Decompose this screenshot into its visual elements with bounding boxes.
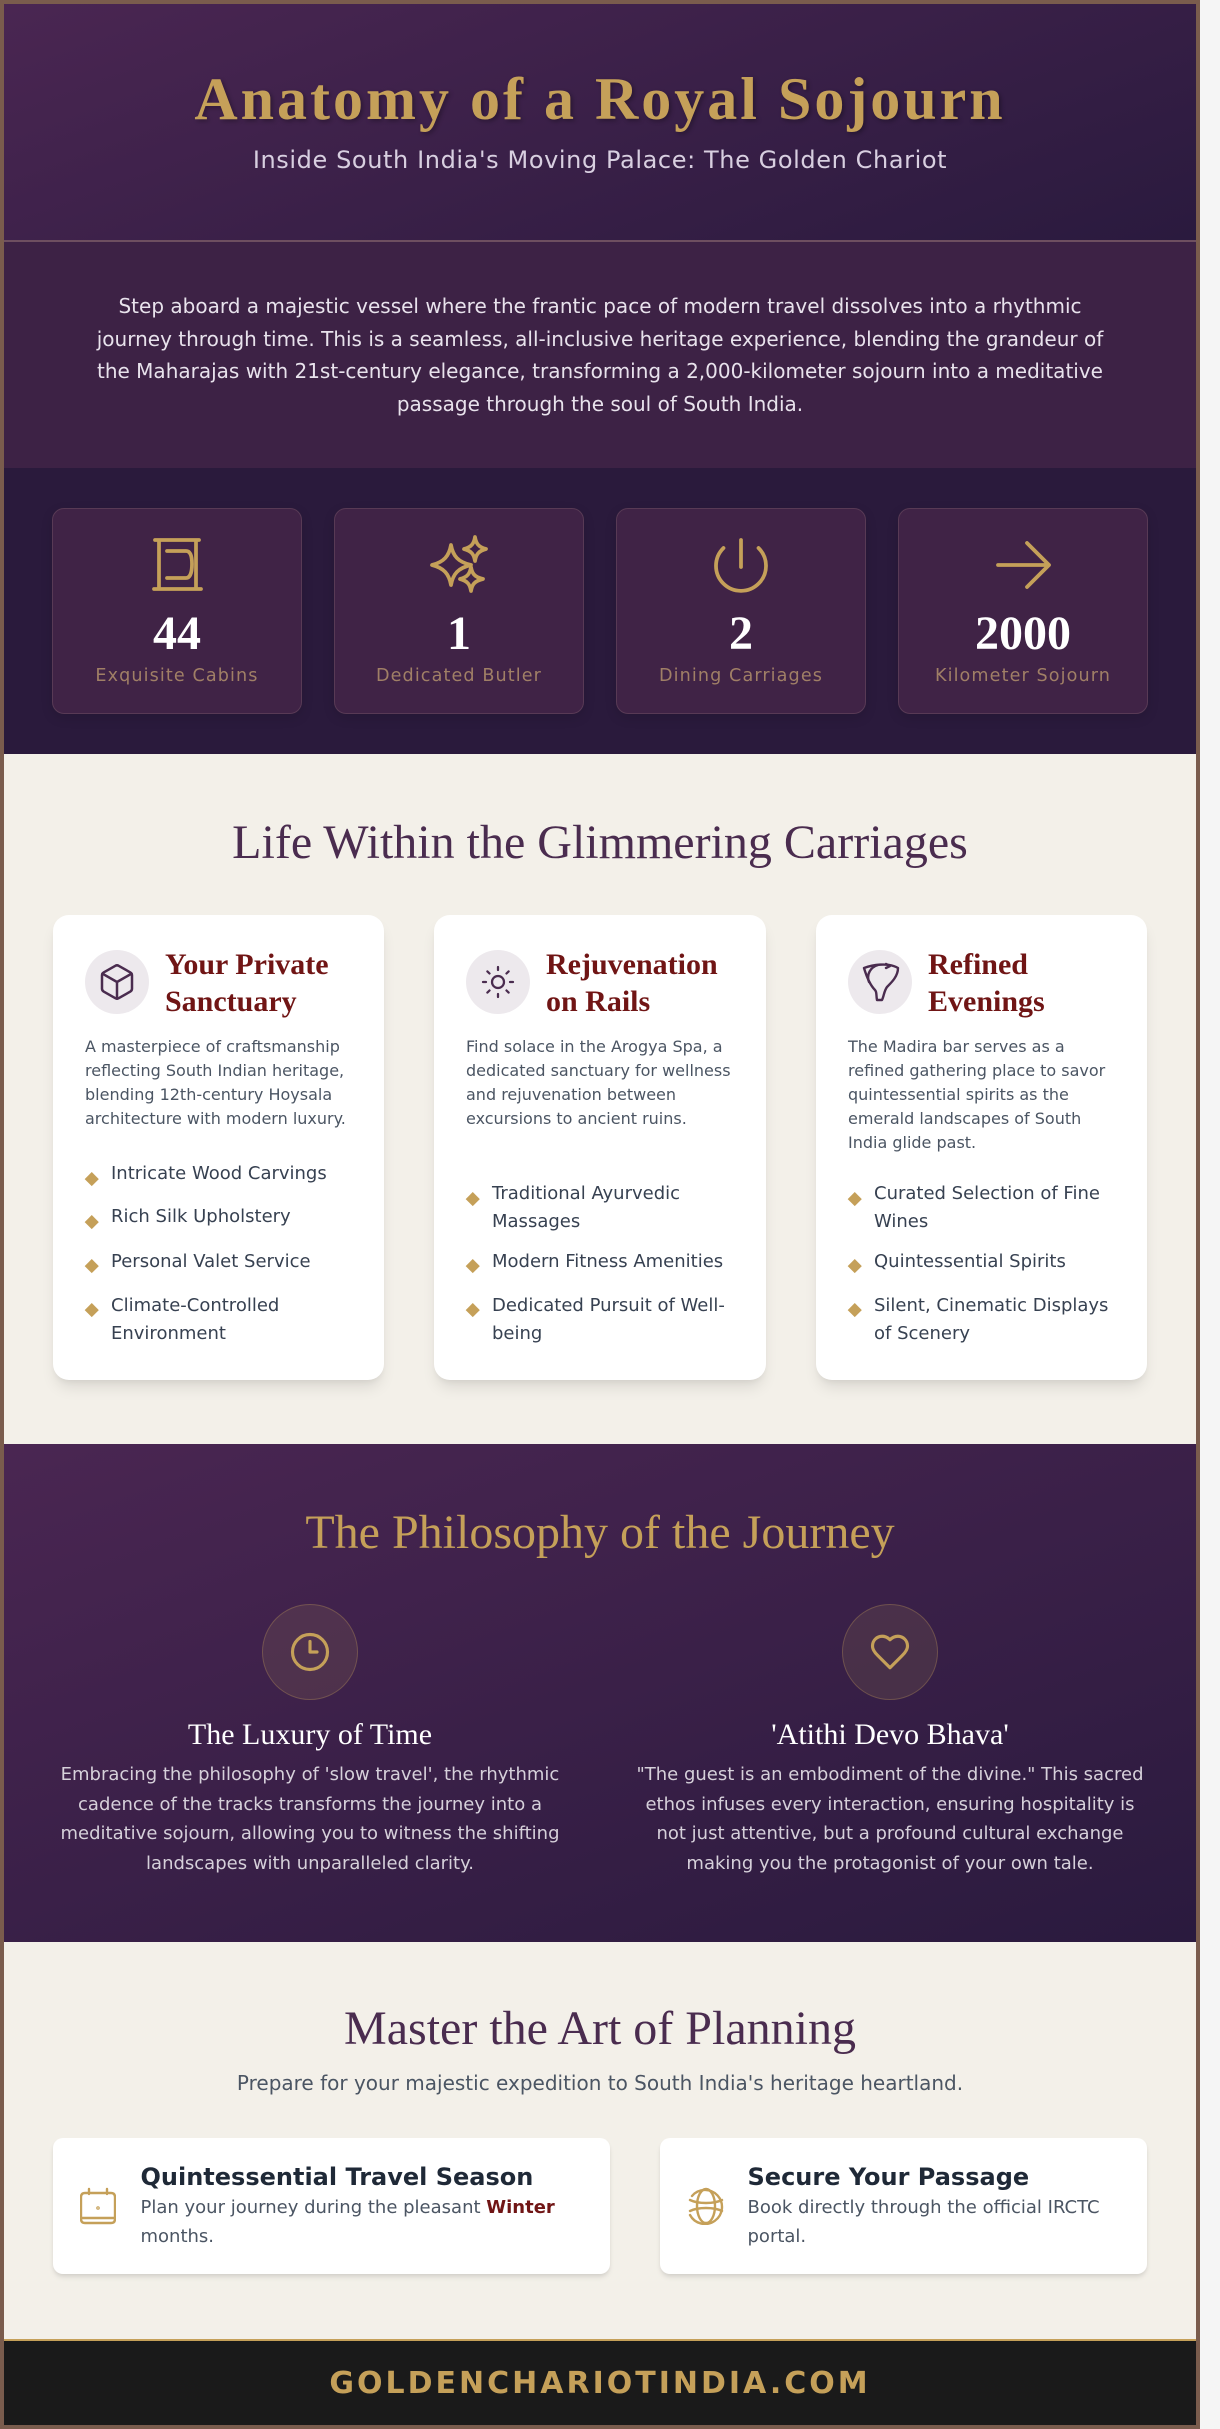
feature list: Traditional Ayurvedic (492, 1183, 680, 1204)
icon: calendar (80, 2188, 116, 2224)
feature list: Silent, Cinematic Displays (874, 1295, 1108, 1316)
stats band (4, 468, 1196, 754)
plan text (140, 2197, 555, 2246)
intro panel (4, 242, 1196, 468)
icon: cabin door (152, 538, 203, 591)
intro text (96, 294, 1104, 416)
feature list: Intricate Wood Carvings (111, 1163, 327, 1184)
card: sanctuary (53, 915, 384, 1380)
description: reflecting South Indian heritage, (85, 1061, 344, 1080)
card title: on Rails (546, 984, 650, 1018)
card title: Evenings (928, 984, 1045, 1018)
number: 1 (447, 607, 471, 660)
card title: Your Private (165, 948, 329, 981)
description: The Madira bar serves as a (848, 1037, 1065, 1056)
pillar text: meditative sojourn, allowing you to witness the shifting (60, 1823, 560, 1844)
feature list: Climate-Controlled (111, 1295, 279, 1316)
description (466, 1037, 731, 1128)
subtitle: Inside South India's Moving Palace: The Golden Chariot (253, 146, 947, 174)
number: 2000 (975, 607, 1071, 660)
plan text: Plan your journey during the pleasant Winter (140, 2197, 555, 2218)
description: architecture with modern luxury. (85, 1109, 346, 1128)
pillar text: "The guest is an embodiment of the divine." This sacred (636, 1764, 1144, 1785)
description: excursions to ancient ruins. (466, 1109, 687, 1128)
plan text: months. (140, 2226, 214, 2246)
card title: Sanctuary (165, 984, 297, 1018)
feature list (848, 1183, 1108, 1344)
description: and rejuvenation between (466, 1085, 676, 1104)
stat: butler (334, 508, 584, 714)
feature list: Rich Silk Upholstery (111, 1206, 291, 1227)
description: blending 12th-century Hoysala (85, 1085, 332, 1104)
card title (165, 948, 329, 1018)
plan title: Secure Your Passage (748, 2163, 1029, 2191)
pillar title: 'Atithi Devo Bhava' (771, 1718, 1009, 1751)
description (85, 1037, 346, 1128)
intro text: the Maharajas with 21st-century elegance, transforming a 2,000-kilometer sojourn into a meditative (97, 359, 1103, 383)
stat: dining (616, 508, 866, 714)
feature list: Dedicated Pursuit of Well- (492, 1295, 725, 1316)
plan card: season (53, 2138, 610, 2274)
description (848, 1037, 1106, 1152)
icon circle: box (85, 950, 149, 1014)
feature list: Personal Valet Service (111, 1251, 311, 1272)
description: dedicated sanctuary for wellness (466, 1061, 731, 1080)
footer (4, 2339, 1196, 2425)
pillar text: making you the protagonist of your own tale. (686, 1853, 1094, 1874)
heading: carriages: Life Within the Glimmering Carriages (232, 816, 968, 869)
icon: sparkles (430, 535, 488, 593)
feature list: of Scenery (874, 1323, 970, 1344)
feature list: being (492, 1323, 542, 1344)
title: Anatomy of a Royal Sojourn (194, 66, 1006, 132)
philosophy panel (4, 1444, 1196, 1942)
icon: heart (842, 1604, 938, 1700)
description: refined gathering place to savor (848, 1061, 1105, 1080)
intro text: journey through time. This is a seamless, all-inclusive heritage experience, blending the grandeur of (97, 327, 1103, 351)
plan text: Book directly through the official IRCTC (748, 2197, 1100, 2218)
feature list: Modern Fitness Amenities (492, 1251, 723, 1272)
pillar text: ethos infuses every interaction, ensuring hospitality is (645, 1794, 1135, 1815)
pillar text: Embracing the philosophy of 'slow travel', the rhythmic (61, 1764, 559, 1785)
description: emerald landscapes of South (848, 1109, 1081, 1128)
stat: cabins (52, 508, 302, 714)
card: evenings (816, 915, 1147, 1380)
heading: planning: Master the Art of Planning (344, 2002, 856, 2055)
feature list: Curated Selection of Fine (874, 1183, 1100, 1204)
number: 2 (729, 607, 753, 660)
footer url: GOLDENCHARIOTINDIA.COM (329, 2366, 871, 2401)
stat: kilometers (898, 508, 1148, 714)
number: 44 (153, 607, 201, 660)
icon: clock (262, 1604, 358, 1700)
header divider (4, 240, 1196, 242)
description: A masterpiece of craftsmanship (85, 1037, 340, 1056)
description: India glide past. (848, 1133, 976, 1152)
pillar text (60, 1764, 560, 1874)
plan text: portal. (748, 2226, 806, 2246)
icon: arrow (996, 541, 1051, 589)
header panel (4, 4, 1196, 240)
pillar: atithi (636, 1604, 1144, 1874)
card title: Refined (928, 948, 1028, 981)
label: Kilometer Sojourn (935, 666, 1111, 686)
card: rejuvenation (434, 915, 766, 1380)
feature list: Massages (492, 1211, 580, 1232)
pillar: time (60, 1604, 560, 1874)
heading: philosophy: The Philosophy of the Journey (305, 1506, 895, 1559)
label: Dedicated Butler (376, 666, 542, 686)
plan card: passage (660, 2138, 1147, 2274)
label: Exquisite Cabins (95, 666, 259, 686)
intro text: passage through the soul of South India. (397, 392, 803, 416)
feature list: Quintessential Spirits (874, 1251, 1066, 1272)
card title (546, 948, 718, 1018)
feature list (84, 1163, 327, 1344)
card title (928, 948, 1045, 1018)
pillar text: landscapes with unparalleled clarity. (146, 1853, 474, 1874)
description: quintessential spirits as the (848, 1085, 1069, 1104)
feature list: Wines (874, 1211, 928, 1232)
card title: Rejuvenation (546, 948, 718, 981)
plan title: Quintessential Travel Season (140, 2163, 533, 2191)
icon: globe (688, 2188, 724, 2225)
label: Dining Carriages (659, 666, 823, 686)
icon circle: outline emblem (848, 950, 912, 1014)
pillar text: cadence of the tracks transforms the journey into a (78, 1794, 542, 1815)
feature list: Environment (111, 1323, 226, 1344)
intro text: Step aboard a majestic vessel where the frantic pace of modern travel dissolves into a rhythmic (118, 294, 1082, 318)
icon: power (714, 538, 768, 593)
plan text (748, 2197, 1100, 2246)
planning subtitle: Prepare for your majestic expedition to South India's heritage heartland. (237, 2071, 963, 2095)
description: Find solace in the Arogya Spa, a (466, 1037, 723, 1056)
pillar text (636, 1764, 1144, 1874)
pillar title: The Luxury of Time (188, 1718, 432, 1751)
feature list (466, 1183, 725, 1344)
pillar text: not just attentive, but a profound cultural exchange (656, 1823, 1124, 1844)
icon circle: sun (466, 950, 530, 1014)
